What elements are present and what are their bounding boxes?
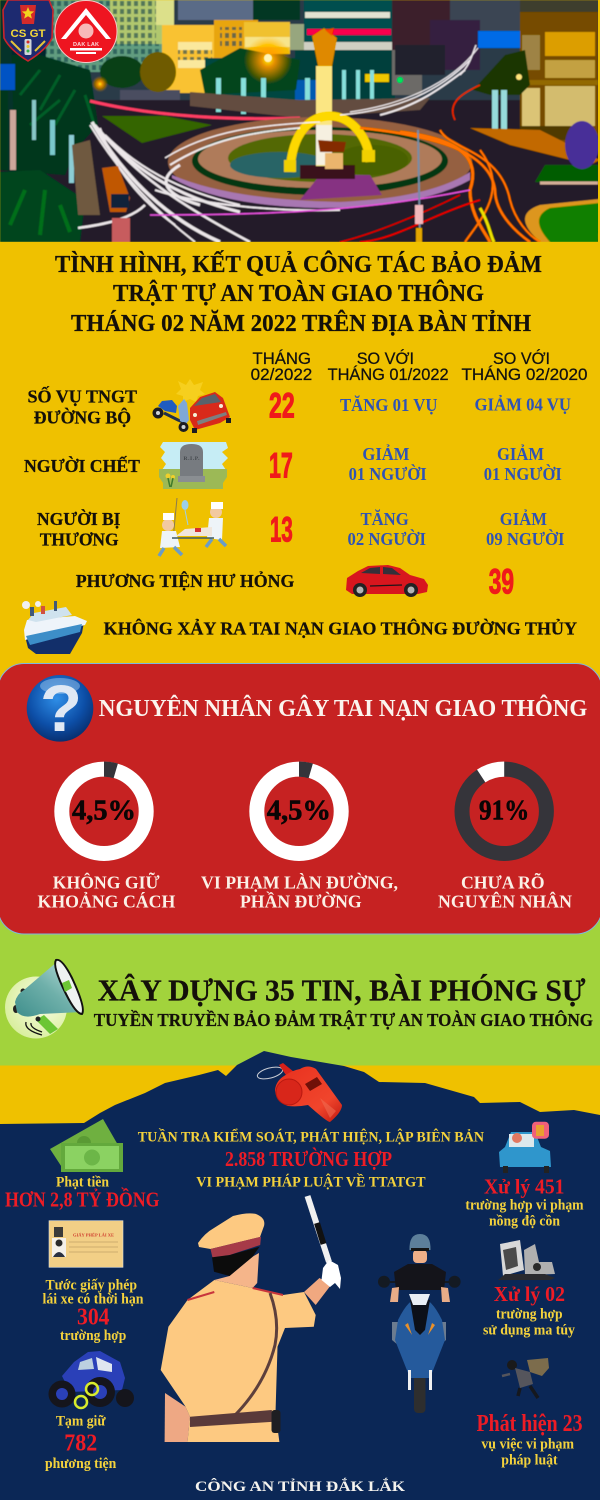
table column headers: THÁNG	[252, 349, 311, 368]
row: số vụ TNGT: TĂNG 01 VỤ	[340, 394, 438, 415]
roundabout	[168, 117, 472, 207]
logo: Dak Lak: DAK LAK	[73, 42, 99, 48]
trees center	[100, 56, 144, 88]
palm trees left	[0, 55, 98, 175]
icon: question globe	[27, 671, 93, 745]
heading: 35 news reports: XÂY DỰNG 35 TIN, BÀI PHÓNG SỰ	[98, 973, 586, 1008]
row: số vụ TNGT	[28, 386, 571, 427]
footer: CÔNG AN TỈNH ĐẮK LẮK	[195, 1478, 405, 1495]
icon: megaphone	[5, 960, 83, 1038]
text: licence suspended: trường hợp	[60, 1328, 126, 1344]
text: other violations	[476, 1411, 582, 1468]
text: licence suspended: lái xe có thời hạn	[42, 1291, 144, 1307]
text: licence suspended: Tước giấy phép	[46, 1277, 137, 1293]
logo: Dak Lak	[55, 0, 117, 62]
icon: whistle	[256, 1063, 342, 1122]
text: patrol results	[138, 1128, 484, 1191]
text: drug cases: Xử lý 02	[494, 1282, 565, 1306]
text: vehicles seized: phương tiện	[45, 1456, 117, 1472]
text: patrol results: 2.858 TRƯỜNG HỢP	[225, 1147, 392, 1171]
icon: gravestone: R.I.P.	[184, 456, 200, 462]
title	[55, 251, 542, 337]
street lights	[264, 54, 272, 62]
green band background	[0, 920, 600, 1066]
yellow band behind mountain	[0, 1066, 600, 1136]
text: fines	[5, 1175, 160, 1212]
donut chart 2: PHẦN ĐƯỜNG	[240, 891, 362, 912]
row: người bị thương: 13	[270, 511, 293, 550]
illustration: traffic police officer	[161, 1196, 341, 1442]
icon: red car	[346, 565, 428, 597]
row: người bị thương: GIẢM	[500, 509, 547, 529]
text: no waterway accidents: KHÔNG XẢY RA TAI NẠN GIAO THÔNG ĐƯỜNG THỦY	[104, 618, 577, 639]
row: người chết: GIẢM	[497, 444, 544, 464]
arch	[290, 116, 370, 172]
icon: driving licence	[49, 1221, 123, 1267]
row: người bị thương	[37, 508, 564, 550]
text: vehicles seized	[45, 1414, 117, 1472]
donut chart 3: CHƯA RÕ	[461, 871, 545, 892]
text: patrol results: VI PHẠM PHÁP LUẬT VỀ TTATGT	[196, 1174, 426, 1191]
row: số vụ TNGT: SỐ VỤ TNGT	[28, 386, 137, 407]
text: other violations: vụ việc vi phạm	[481, 1436, 574, 1452]
icon: gravestone	[159, 442, 228, 489]
donut chart 3: NGUYÊN NHÂN	[438, 891, 572, 912]
row: người chết	[24, 444, 562, 486]
row: số vụ TNGT: 22	[269, 386, 295, 425]
text: licence suspended	[42, 1277, 144, 1344]
row: người chết: 17	[269, 447, 293, 486]
table column headers: 02/2022	[251, 366, 312, 384]
text: alcohol violations: nồng độ cồn	[489, 1214, 561, 1230]
row: người bị thương: 09 NGƯỜI	[486, 528, 564, 549]
logo: CSGT shield	[3, 0, 53, 61]
monument column	[316, 66, 332, 166]
row: phương tiện hư hỏng: PHƯƠNG TIỆN HƯ HỎNG	[76, 570, 294, 591]
text: drug cases: trường hợp	[496, 1306, 563, 1322]
table column headers: THÁNG 01/2022	[328, 365, 449, 384]
panel: causes	[0, 664, 600, 934]
donut chart 2	[201, 762, 398, 912]
navy mountain panel	[0, 1051, 600, 1500]
donut chart 3: 91%	[479, 794, 529, 826]
text: other violations: pháp luật	[501, 1452, 558, 1468]
text: licence suspended: 304	[77, 1304, 110, 1330]
row: số vụ TNGT: GIẢM 04 VỤ	[474, 394, 571, 414]
pole	[418, 130, 420, 242]
table column headers: THÁNG 02/2020	[462, 365, 588, 384]
icon: car with beer	[499, 1122, 551, 1173]
right palms	[473, 50, 530, 95]
icon: thief	[502, 1358, 549, 1398]
text: drug cases: sử dụng ma túy	[483, 1322, 575, 1338]
text: vehicles seized: Tạm giữ	[56, 1414, 107, 1430]
donut chart 2: VI PHẠM LÀN ĐƯỜNG,	[201, 871, 398, 892]
sidewalk	[72, 140, 100, 215]
text: drug cases	[483, 1282, 575, 1338]
icon: question globe: ?	[40, 671, 82, 745]
icon: crash	[152, 379, 231, 433]
row: người chết: GIẢM	[362, 444, 410, 464]
icon: ship	[22, 601, 87, 654]
donut chart 1: 4,5%	[72, 794, 136, 826]
donut chart 1	[38, 762, 175, 912]
heading: NGUYÊN NHÂN GÂY TAI NẠN GIAO THÔNG	[99, 695, 588, 722]
icon: driving licence: GIẤY PHÉP LÁI XE	[73, 1232, 114, 1238]
title: TÌNH HÌNH, KẾT QUẢ CÔNG TÁC BẢO ĐẢM	[55, 251, 542, 278]
heading: 35 news reports	[94, 973, 593, 1030]
logo: CSGT shield: CS GT	[10, 28, 46, 40]
text: fines: Phạt tiền	[56, 1175, 110, 1191]
header photo: roundabout at night	[0, 0, 600, 242]
illustration: motorcyclist	[378, 1234, 461, 1413]
icon: police car and handcuffs	[48, 1351, 134, 1408]
text: alcohol violations: Xử lý 451	[484, 1174, 564, 1198]
text: alcohol violations	[465, 1174, 584, 1230]
text: vehicles seized: 782	[64, 1431, 97, 1457]
plaza band	[190, 92, 430, 118]
bus and van	[102, 166, 130, 212]
icon: medics with stretcher	[159, 498, 226, 556]
title: THÁNG 02 NĂM 2022 TRÊN ĐỊA BÀN TỈNH	[71, 310, 531, 337]
table column headers	[251, 349, 587, 384]
row: người bị thương: 02 NGƯỜI	[348, 528, 426, 549]
text: alcohol violations: trường hợp vi phạm	[465, 1197, 584, 1213]
row: phương tiện hư hỏng: 39	[489, 562, 514, 601]
lawn triangle	[102, 116, 212, 143]
icon: cash	[50, 1119, 123, 1172]
donut chart 3	[438, 762, 572, 912]
icon: drugs	[498, 1240, 555, 1280]
row: người chết: 01 NGƯỜI	[484, 463, 562, 484]
row: người bị thương: TĂNG	[360, 508, 409, 529]
text: fines: HƠN 2,8 TỶ ĐỒNG	[5, 1188, 160, 1212]
donut chart 1: KHOẢNG CÁCH	[38, 891, 175, 912]
row: người chết: 01 NGƯỜI	[349, 463, 427, 484]
row: phương tiện hư hỏng	[76, 562, 514, 601]
donut chart 2: 4,5%	[267, 794, 331, 826]
lawn bottom right	[525, 199, 600, 242]
text: patrol results: TUẦN TRA KIỂM SOÁT, PHÁT HIỆN, LẬP BIÊN BẢN	[138, 1128, 484, 1146]
title: TRẬT TỰ AN TOÀN GIAO THÔNG	[113, 280, 484, 307]
row: người bị thương: THƯƠNG	[40, 530, 119, 550]
row: người bị thương: NGƯỜI BỊ	[37, 508, 120, 529]
table column headers: SO VỚI	[357, 349, 414, 368]
white light trails	[78, 45, 478, 242]
donut chart 1: KHÔNG GIỮ	[53, 871, 160, 892]
row: số vụ TNGT: ĐƯỜNG BỘ	[34, 406, 131, 427]
row: người chết: NGƯỜI CHẾT	[24, 455, 140, 476]
table column headers: SO VỚI	[493, 349, 550, 368]
